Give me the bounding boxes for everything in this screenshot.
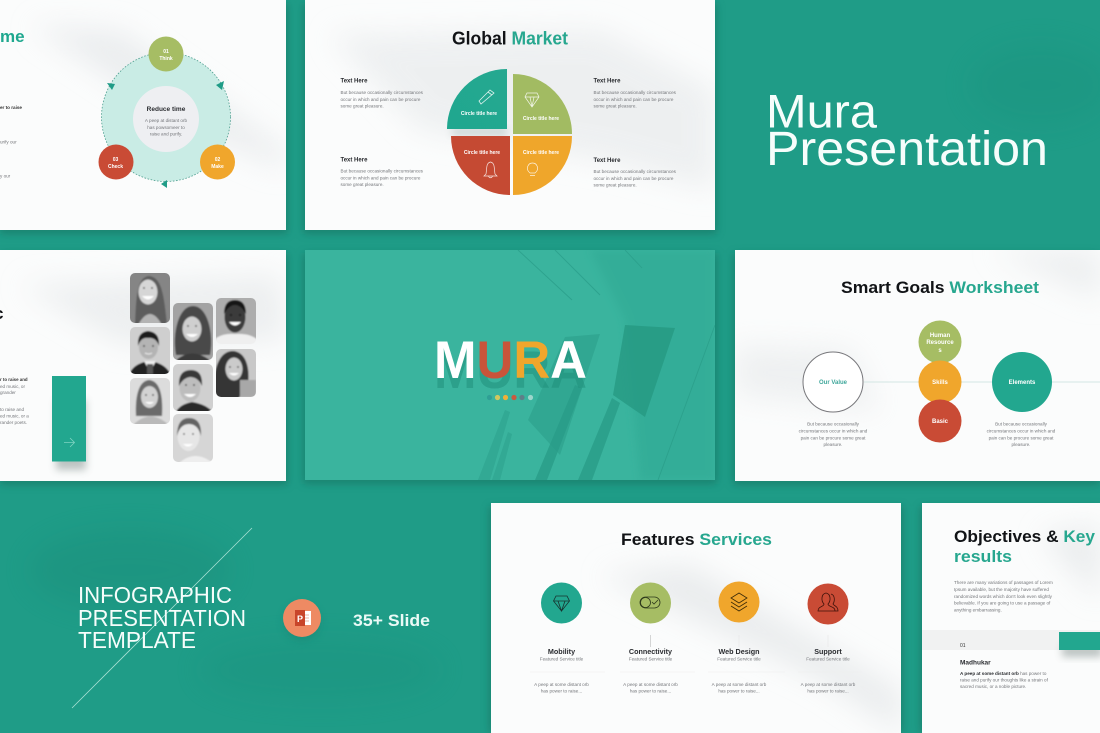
circle: Basic — [918, 400, 962, 442]
icon: pencil — [479, 90, 494, 104]
text block: top left: Text Here — [340, 78, 368, 84]
text fragments: rander poets. — [0, 420, 27, 425]
panel: features services slide — [491, 503, 901, 733]
title: Smart Goals Worksheet — [841, 278, 1039, 297]
text block: bottom right — [594, 158, 677, 188]
text: infographic presentation template: TEMPLATE — [78, 627, 196, 653]
text block: top left: occur in which and pain can be procure — [340, 97, 421, 102]
service: web design: Web Design — [718, 647, 760, 656]
text block: left: pleasure. — [824, 442, 842, 447]
text block: bottom right: occur in which and pain can be procure — [594, 176, 674, 181]
teal tab — [1059, 632, 1100, 650]
service: support: has power to raise... — [807, 688, 849, 694]
text fragments: grander — [0, 390, 16, 395]
icon: layers — [731, 593, 747, 611]
text block: top right — [594, 78, 677, 108]
circle: Skills — [918, 360, 962, 404]
node: 03 Check: 03 — [113, 157, 118, 163]
service: mobility: Mobility — [548, 647, 575, 656]
text block: bottom right: some great pleasure. — [594, 182, 637, 188]
icon: bell — [484, 162, 497, 178]
text block: top left: some great pleasure. — [340, 104, 384, 108]
paragraph — [954, 580, 1053, 612]
icon: diamond — [554, 596, 570, 611]
text block: bottom right: Text Here — [594, 158, 621, 164]
text block: top right: occur in which and pain can be procure — [594, 97, 674, 102]
service: web design — [708, 582, 785, 694]
item: Madhukar: sacred music, or a noble picture. — [960, 684, 1026, 689]
logo shadow: MURA — [434, 341, 587, 400]
item: Madhukar: A peep at some distant orb has power to — [960, 671, 1047, 676]
title: Features Services — [621, 530, 772, 549]
text block: top right: some great pleasure. — [594, 104, 637, 108]
text: 35+ slide: 35+ Slide — [353, 611, 430, 630]
item: Madhukar — [960, 660, 1049, 689]
circle: Our Value — [803, 352, 863, 412]
centre circle — [133, 86, 199, 152]
teal button with arrow — [52, 376, 86, 462]
text block: bottom left: occur in which and pain can be procure — [340, 176, 421, 180]
service: support: Featured Service title — [806, 656, 850, 662]
text block: bottom left — [340, 158, 424, 187]
icon: bulb — [527, 163, 538, 176]
circle: Human Resources: Human — [930, 333, 950, 339]
text: infographic presentation template: INFOGRAPHIC — [78, 582, 232, 608]
wedge: teal: Circle title here — [461, 111, 497, 117]
item: Madhukar: raise and purify our thoughts like a strain of — [960, 678, 1049, 682]
service: connectivity: A peep at some distant orb — [623, 682, 678, 687]
cover title: Mura Presentation: Presentation — [766, 123, 1048, 176]
heading fragment: me — [0, 27, 25, 46]
pie chart — [447, 69, 572, 195]
service: connectivity: has power to raise... — [630, 688, 671, 694]
text fragments: urify our — [0, 140, 17, 144]
node: 03 Check — [98, 144, 134, 180]
panel: smart goals slide — [735, 250, 1100, 481]
teal tab shadow — [1062, 645, 1100, 657]
service: connectivity: Featured Service title — [629, 656, 673, 662]
node: 01 Think — [148, 36, 184, 72]
wedge: red: Circle title here — [464, 150, 500, 156]
logo: MURA: MURA — [434, 331, 587, 390]
text block: right: pleasure. — [1012, 442, 1030, 447]
service: web design: has power to raise... — [718, 688, 760, 694]
text fragments: r to raise and — [0, 377, 28, 382]
service: mobility: A peep at some distant orb — [534, 682, 589, 687]
title — [954, 527, 1096, 566]
circle: Human Resources: s — [938, 348, 942, 354]
photo 5 — [173, 364, 213, 411]
photo 7 — [216, 298, 256, 340]
item: Madhukar: Madhukar — [960, 660, 991, 666]
paragraph: There are many variations of passages of Lorem — [954, 580, 1053, 585]
centre text: has powsomeer to — [147, 125, 185, 130]
text block: top left — [340, 78, 424, 108]
circle: Human Resources — [918, 320, 962, 364]
text fragments: ed music, or a — [0, 414, 29, 418]
node: 02 Make — [200, 144, 235, 180]
circle: Human Resources: Resource — [926, 340, 954, 346]
cycle ring — [102, 52, 230, 188]
arrow: left — [107, 83, 115, 90]
text fragments — [0, 105, 22, 178]
text block: right: pain can be procure some great — [989, 436, 1054, 440]
node: 02 Make: 02 — [215, 157, 220, 163]
button shadow — [56, 400, 86, 470]
text block: left — [799, 422, 868, 447]
text: infographic presentation template: PRESENTATION — [78, 605, 246, 631]
paragraph: randomized words which don't look even slightly — [954, 594, 1053, 599]
node: 01 Think: Think — [159, 56, 173, 62]
text fragments: to raise and — [0, 407, 24, 412]
photo 6 — [173, 414, 213, 462]
circle: Elements — [992, 352, 1052, 412]
photo 2 — [130, 327, 170, 374]
title: Objectives & Key — [954, 527, 1096, 546]
photo 8 — [214, 347, 258, 399]
text block: right — [987, 422, 1056, 447]
text block: right: circumstances occur in which and — [987, 428, 1056, 434]
circle: Our Value: Our Value — [819, 380, 848, 386]
text block: bottom left: But because occasionally circumstances — [340, 168, 424, 174]
paragraph: Ipsum available, but the majority have suffered — [954, 587, 1049, 592]
centre text: Reduce time — [147, 106, 186, 113]
service: support: Support — [814, 647, 842, 656]
panel: global market slide — [305, 0, 715, 230]
icon: diamond — [525, 93, 539, 107]
icon: powerpoint — [283, 599, 321, 641]
centre text: A peep at distant orb — [145, 118, 188, 123]
arrow: bottom — [161, 180, 167, 188]
title: results — [954, 547, 1012, 566]
circle: Basic: Basic — [932, 419, 949, 425]
cover title: Mura Presentation: Mura — [766, 84, 878, 138]
text block: left: pain can be procure some great — [801, 436, 866, 440]
service: mobility — [530, 582, 605, 694]
service: mobility: Featured Service title — [540, 656, 584, 662]
icon: users — [818, 593, 838, 611]
text block: bottom left: Text Here — [340, 158, 368, 164]
title: Global Market — [452, 28, 568, 48]
icon: powerpoint: P — [297, 614, 303, 624]
photo 4 — [173, 303, 213, 360]
item number: 01 — [960, 643, 966, 649]
text fragments — [0, 377, 29, 425]
wedge: orange: Circle title here — [523, 150, 559, 156]
photos — [128, 271, 258, 464]
service: support — [798, 584, 862, 694]
text block: top right: But because occasionally circumstances — [594, 90, 677, 95]
text block: top right: Text Here — [594, 78, 621, 84]
service: web design: Featured Service title — [717, 656, 761, 662]
text block: bottom left: some great pleasure. — [340, 182, 384, 187]
service: mobility: has power to raise... — [541, 688, 582, 694]
node: 01 Think: 01 — [163, 49, 169, 55]
centre text — [145, 106, 188, 136]
service: connectivity: Connectivity — [629, 647, 672, 656]
paragraph: believable. If you are going to use a passage of — [954, 600, 1051, 606]
photo 1 — [130, 273, 170, 323]
text block: left: But because occasionally — [807, 422, 860, 426]
service: web design: A peep at some distant orb — [712, 682, 767, 687]
node: 02 Make: Make — [211, 164, 224, 170]
text fragments: y our — [0, 174, 11, 178]
text fragments: ed music, or — [0, 384, 25, 389]
service: support: A peep at some distant orb — [801, 682, 856, 687]
text block: right: But because occasionally — [995, 422, 1048, 426]
text block: left: circumstances occur in which and — [799, 428, 868, 434]
centre text: raise and purify. — [150, 132, 182, 136]
text block: bottom right: But because occasionally circumstances — [594, 169, 677, 174]
building photo overlay — [478, 250, 715, 480]
service: connectivity — [620, 582, 695, 694]
decorative diagonal line — [72, 528, 252, 708]
panel: cycle diagram slide — [0, 0, 286, 230]
panel: objectives and key results slide — [922, 503, 1100, 733]
wedge: green: Circle title here — [523, 116, 559, 122]
node: 03 Check: Check — [108, 164, 123, 170]
icon: toggle — [640, 597, 660, 608]
cover title: Mura Presentation — [766, 84, 1048, 176]
text fragments: er to raise — [0, 105, 22, 110]
connector lines — [864, 381, 1100, 383]
dots — [487, 395, 533, 400]
panel: MURA cover slide — [305, 250, 715, 480]
paragraph: anything embarrassing. — [954, 608, 1002, 612]
arrow: right — [216, 81, 224, 90]
panel: team photos slide — [0, 250, 286, 481]
circle: Elements: Elements — [1009, 380, 1036, 386]
text: infographic presentation template — [78, 582, 246, 653]
photo 3 — [130, 378, 170, 424]
text block: top left: But because occasionally circumstances — [340, 90, 424, 95]
circle: Skills: Skills — [932, 380, 948, 386]
